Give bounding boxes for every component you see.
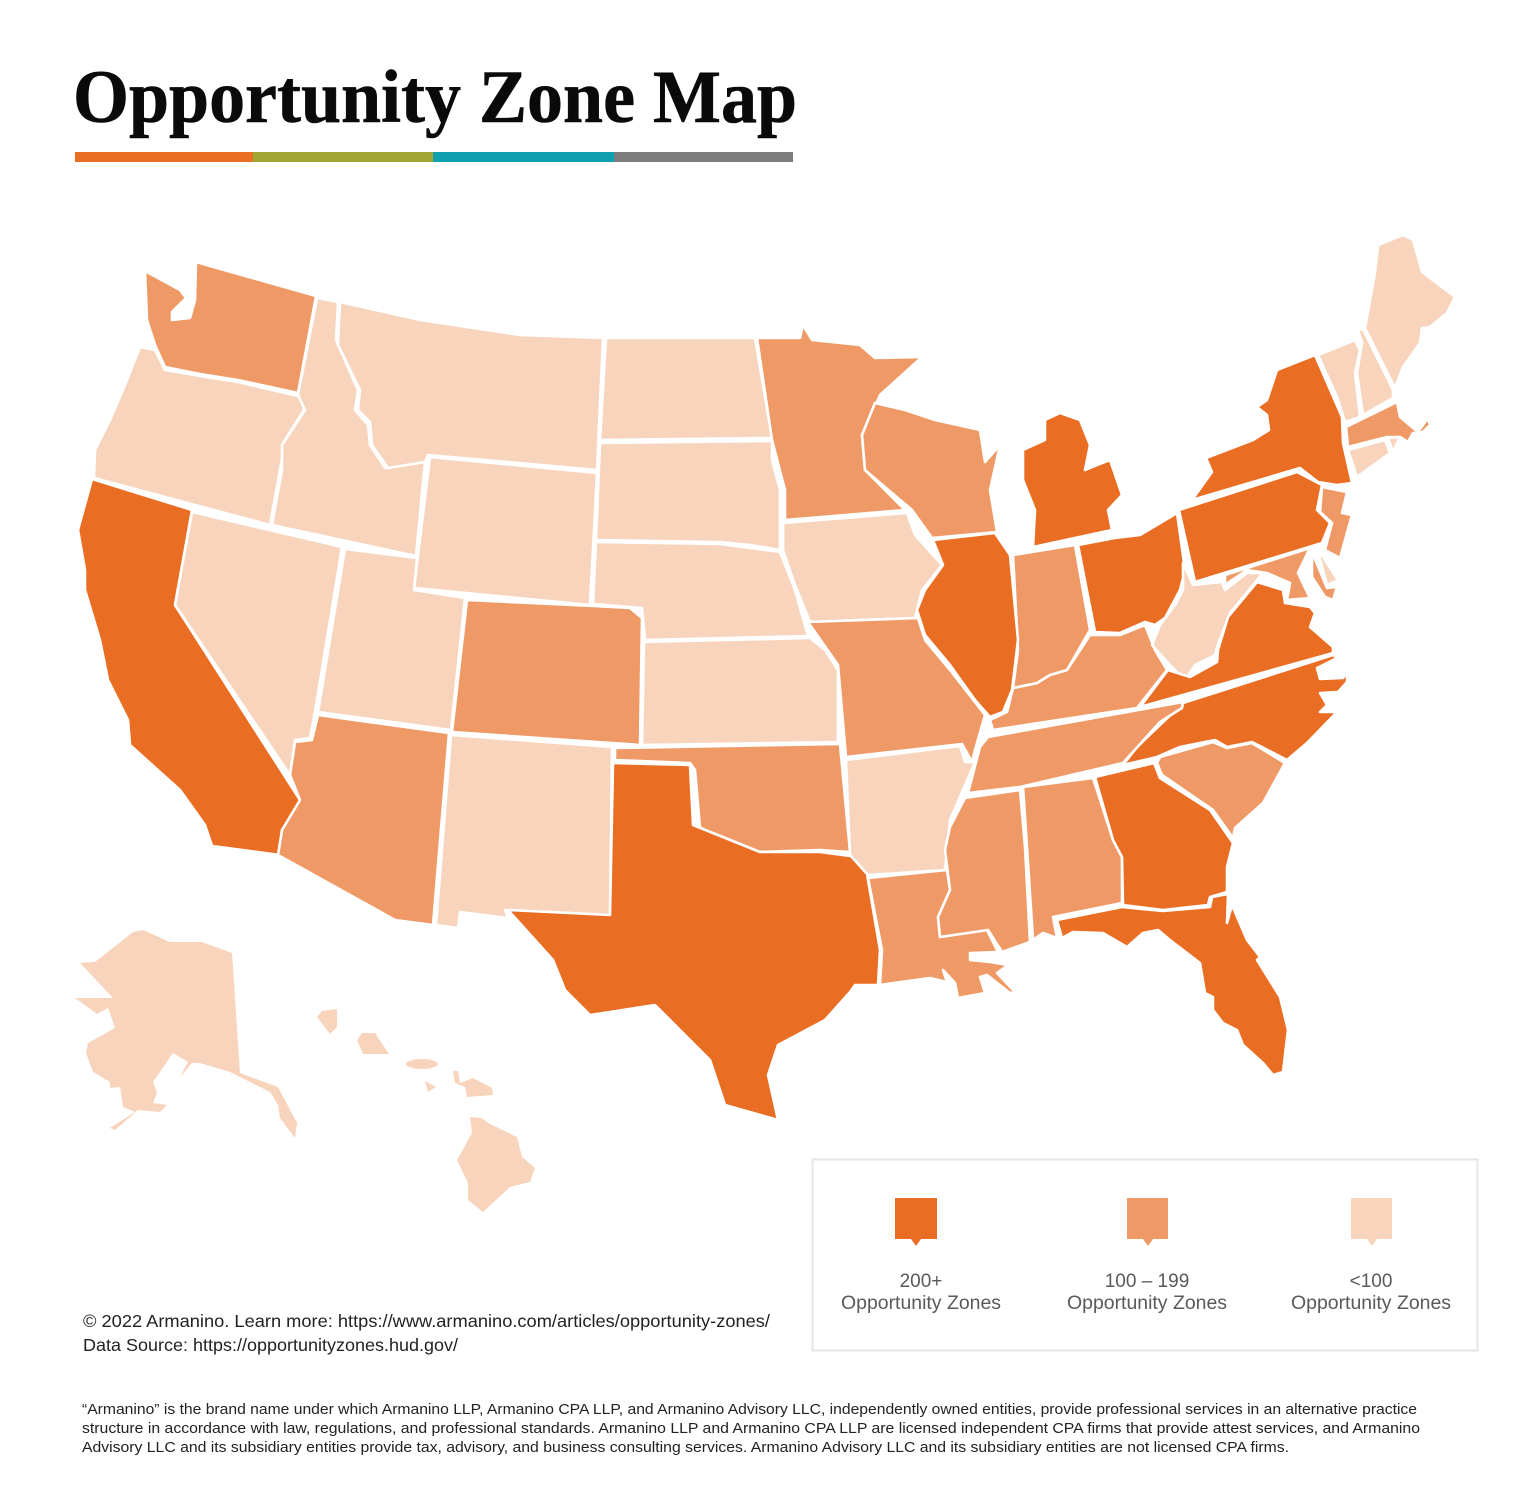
map: Alaska: [75, 930, 297, 1138]
legend item: under 100: Opportunity Zones: [1291, 1293, 1451, 1314]
state: California: [78, 479, 300, 855]
state: Ohio: [1078, 513, 1185, 633]
legend item: 100-199: 100 – 199: [1105, 1271, 1189, 1292]
state: Massachusetts: [1346, 402, 1430, 447]
state: North Dakota: [600, 338, 772, 440]
legend item: 100-199: Opportunity Zones: [1067, 1293, 1227, 1314]
state: Minnesota: [757, 325, 922, 520]
state: Wyoming: [414, 457, 597, 605]
state: Arkansas: [846, 746, 975, 875]
state: Texas: [508, 763, 880, 1120]
title: Opportunity Zone Map: [73, 56, 797, 139]
legal disclaimer: “Armanino” is the brand name under which Armanino LLP, Armanino CPA LLP, and Armanino Advisory LLC, independently owned entities, provide professional services in an alternative practice: [82, 1401, 1417, 1418]
source credits: Data Source: https://opportunityzones.hud.gov/: [83, 1335, 458, 1355]
state: Oklahoma: [615, 744, 850, 852]
state: Arizona: [278, 715, 449, 925]
state: Maine: [1365, 235, 1455, 388]
legal disclaimer: Advisory LLC and its subsidiary entities provide tax, advisory, and business consulting services. Armanino Advisory LLC and its subsidiary entities are not licensed CPA firms.: [82, 1439, 1289, 1456]
state: Oregon: [94, 347, 304, 525]
state: Utah: [318, 549, 465, 730]
state: Montana: [338, 302, 603, 470]
state: North Carolina: [1123, 655, 1347, 765]
state: Mississippi: [938, 790, 1030, 952]
legal disclaimer: structure in accordance with law, regulations, and professional standards. Armanino LLP and Armanino CPA LLP are licensed independent CPA firms that provide attest services, and Armanino: [82, 1420, 1420, 1437]
state: Connecticut: [1348, 440, 1390, 477]
state: Georgia: [1095, 763, 1233, 910]
state: Nevada: [175, 512, 342, 775]
legal disclaimer: [82, 1401, 1420, 1456]
state: Rhode Island: [1388, 437, 1400, 452]
state: Pennsylvania: [1179, 472, 1330, 582]
state: Missouri: [808, 618, 985, 762]
state: Virginia: [1140, 582, 1333, 707]
state: Alabama: [1023, 778, 1122, 940]
state: West Virginia: [1152, 563, 1263, 680]
state: New Mexico: [436, 735, 612, 928]
state: Michigan: [1023, 413, 1122, 547]
legend panel: [812, 1160, 1478, 1350]
legend item: 200+: 200+: [900, 1271, 942, 1292]
state: Louisiana: [868, 870, 1015, 998]
state: Maryland eastern shore: [1312, 552, 1337, 600]
legend item: under 100: [1291, 1198, 1451, 1314]
state: Kansas: [642, 638, 838, 745]
legend item: under 100: <100: [1350, 1271, 1392, 1292]
state: Washington: [145, 262, 316, 393]
state: South Dakota: [596, 441, 780, 550]
title colour bar: [75, 152, 793, 162]
state: Kentucky: [990, 625, 1167, 730]
state: Iowa: [783, 513, 942, 622]
state: Indiana: [1013, 545, 1090, 688]
state: Maryland: [1225, 548, 1310, 600]
state: Delaware: [1317, 548, 1338, 585]
source credits: [83, 1311, 770, 1355]
state: New Hampshire: [1357, 329, 1393, 415]
state: South Carolina: [1157, 742, 1285, 838]
state: Tennessee: [968, 702, 1183, 793]
state: Colorado: [452, 600, 642, 745]
map: Hawaii: [317, 1009, 535, 1212]
map: contiguous United States: [78, 235, 1455, 1120]
state: Vermont: [1318, 340, 1360, 422]
state: Wisconsin: [862, 403, 1000, 538]
state: Florida: [1057, 894, 1288, 1075]
legend item: 100-199: [1067, 1198, 1227, 1314]
state: Illinois: [917, 533, 1018, 717]
source credits: © 2022 Armanino. Learn more: https://www.armanino.com/articles/opportunity-zones/: [83, 1311, 770, 1331]
state: Idaho: [272, 298, 425, 556]
legend item: 200+: [841, 1198, 1001, 1314]
legend item: 200+: Opportunity Zones: [841, 1293, 1001, 1314]
state: New York: [1192, 355, 1352, 500]
state: New Jersey: [1320, 487, 1352, 558]
state: Nebraska: [593, 542, 808, 640]
